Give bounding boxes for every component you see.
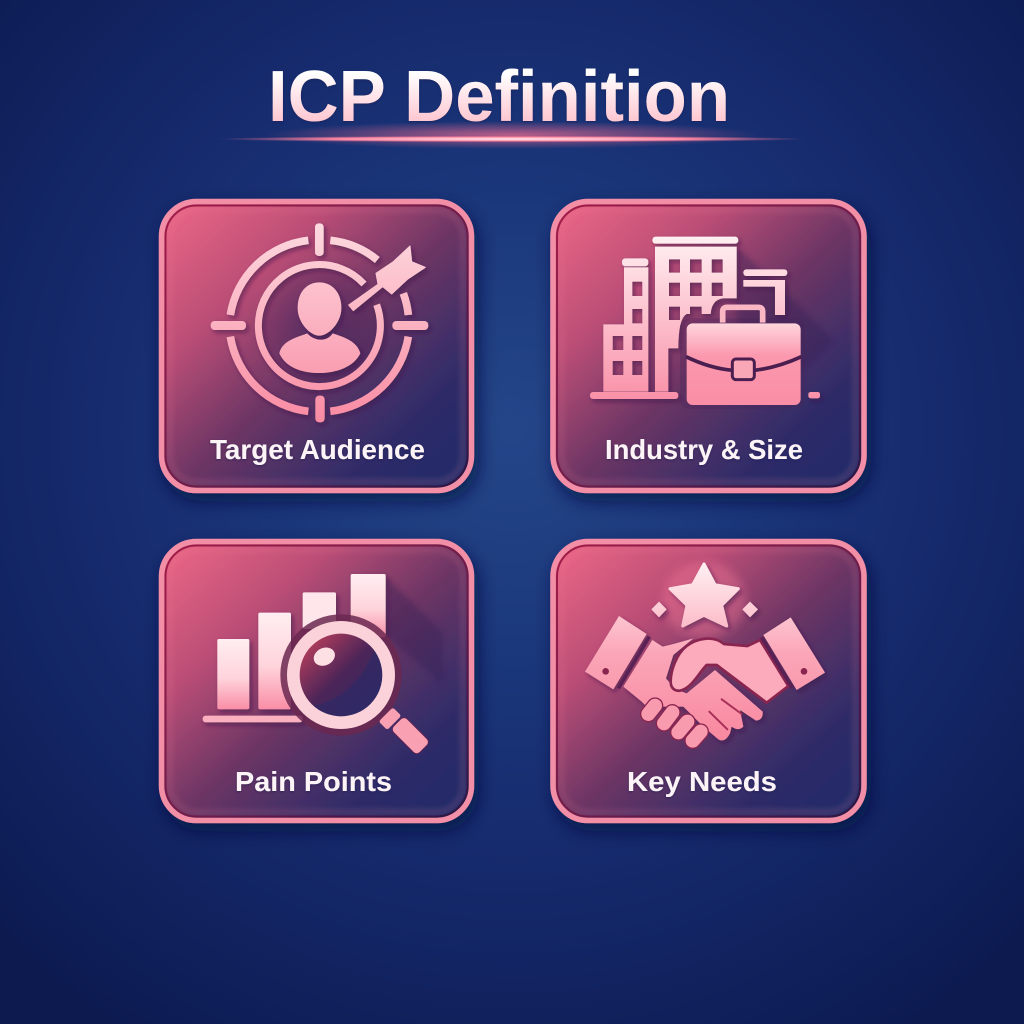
briefcase — [680, 307, 805, 409]
panel: pain points — [162, 542, 472, 820]
left hand — [623, 638, 693, 707]
icon: handshake with star — [585, 562, 825, 741]
title underline glow — [217, 121, 807, 149]
icon: bar chart and magnifying glass — [203, 574, 443, 756]
star — [670, 564, 738, 626]
closed fingers — [648, 706, 701, 741]
label: pain points: Pain Points — [235, 766, 392, 797]
card frame — [553, 202, 864, 490]
panel: industry and size — [553, 202, 864, 490]
right cuff — [763, 617, 825, 690]
label: industry and size: Industry & Size — [605, 434, 803, 465]
card frame — [553, 542, 864, 820]
icon: buildings and briefcase — [590, 237, 833, 409]
title: ICP Definition — [268, 57, 730, 137]
magnifying glass — [280, 614, 430, 756]
label: target audience: Target Audience — [210, 434, 425, 465]
card frame — [162, 202, 472, 490]
icon: target with person and arrow — [211, 223, 428, 422]
bar chart — [203, 574, 386, 722]
label: key needs: Key Needs — [627, 766, 777, 797]
gripping palm and fingers — [668, 670, 763, 740]
left cuff — [585, 616, 647, 689]
card frame — [162, 542, 472, 820]
thumb and right forearm — [671, 639, 788, 703]
finger separators — [709, 699, 742, 729]
panel: target audience — [162, 202, 472, 490]
panel: key needs — [553, 542, 864, 820]
